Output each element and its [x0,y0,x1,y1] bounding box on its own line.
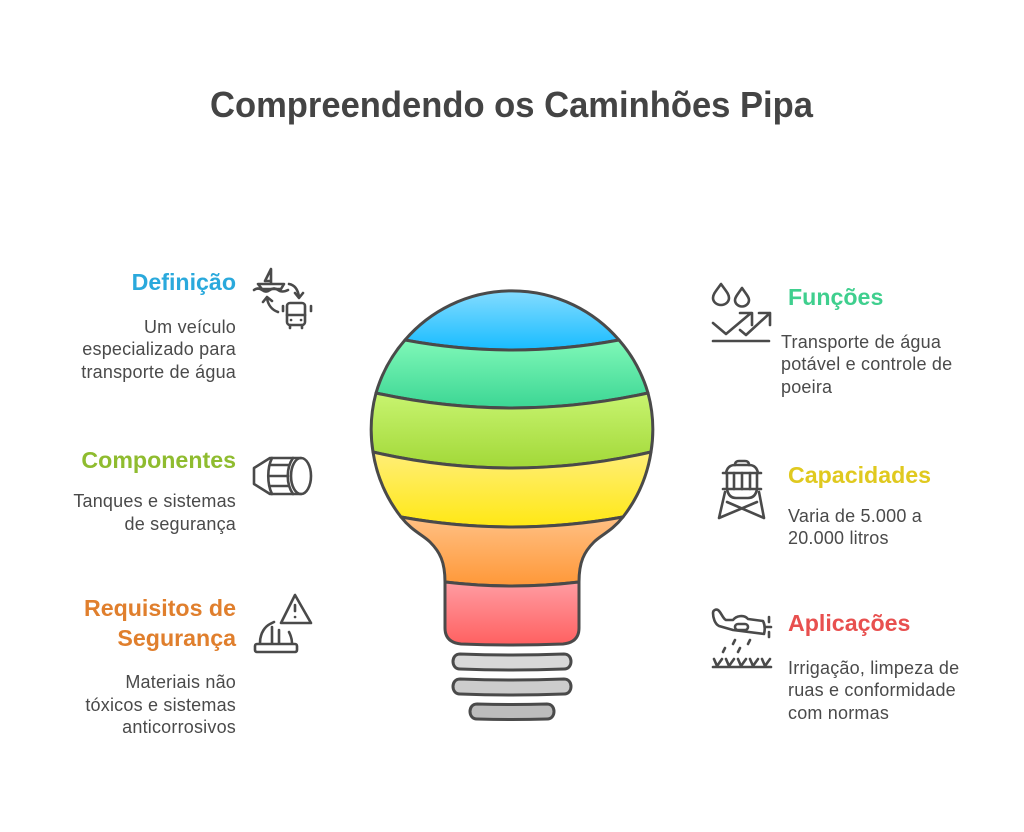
screw thread 3 [470,704,554,720]
bulb segment: green [376,340,648,408]
bulb segment: blue [405,291,619,350]
heading: Capacidades [788,462,931,488]
description: 20.000 litros [788,528,889,548]
item: Componentes [73,447,237,534]
heading: Segurança [117,625,237,651]
description: anticorrosivos [122,717,236,737]
item: Requisitos de Segurança [84,595,237,737]
description: Materiais não [125,672,236,692]
icon: tank barrel [254,458,311,494]
heading: Definição [132,269,236,295]
icon: warning and dome [255,595,311,652]
icon: boat and bus cycle [254,269,311,328]
icon: water drops and arrows [713,284,770,341]
description: Varia de 5.000 a [788,506,923,526]
icon: water tower [719,461,764,518]
description: transporte de água [81,362,237,382]
description: tóxicos e sistemas [85,695,236,715]
description: Transporte de água [781,332,942,352]
heading: Funções [788,284,883,310]
item: Definição [81,269,237,382]
heading: Aplicações [788,610,910,636]
screw thread 1 [453,654,571,670]
description: de segurança [125,514,237,534]
screw thread 2 [453,679,571,695]
icon: crop-duster plane [713,610,771,667]
description: especializado para [82,339,237,359]
description: com normas [788,703,889,723]
bulb segment: red [445,582,579,645]
item: Aplicações [788,610,959,723]
description: ruas e conformidade [788,680,956,700]
description: Um veículo [144,317,236,337]
item: Capacidades [788,462,931,548]
description: Irrigação, limpeza de [788,658,959,678]
description: potável e controle de [781,354,952,374]
bulb segment: orange [401,517,623,586]
heading: Componentes [81,447,236,473]
light bulb diagram [371,291,653,720]
description: Tanques e sistemas [73,491,236,511]
description: poeira [781,377,833,397]
title: Compreendendo os Caminhões Pipa [210,84,814,125]
heading: Requisitos de [84,595,236,621]
bulb segment: lime [371,393,653,468]
bulb segment: yellow [373,452,651,527]
item: Funções [781,284,952,397]
